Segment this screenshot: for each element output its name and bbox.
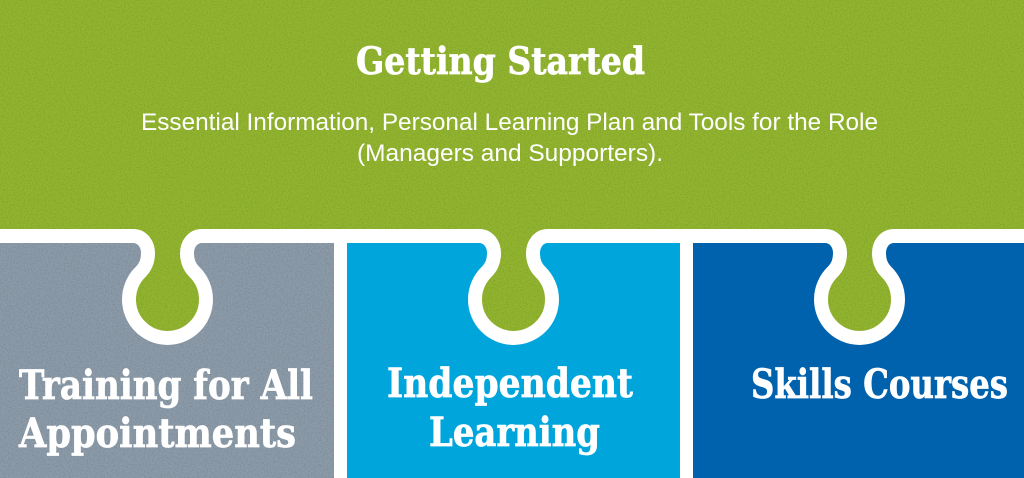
panel: getting started green puzzle piece xyxy=(0,0,1024,338)
description text xyxy=(141,109,878,167)
white gutter between first and second panels xyxy=(334,236,347,478)
description text: (Managers and Supporters). xyxy=(357,140,663,167)
description text: Essential Information, Personal Learning Plan and Tools for the Role xyxy=(141,109,878,136)
heading: training for all appointments xyxy=(18,362,313,457)
heading: independent learning: Learning xyxy=(429,409,600,456)
heading: independent learning xyxy=(387,360,633,456)
heading: independent learning: Independent xyxy=(387,360,633,407)
heading: training for all appointments: Appointments xyxy=(18,410,296,457)
panel: independent learning xyxy=(347,236,680,478)
heading: training for all appointments: Training for All xyxy=(19,362,313,409)
panel: training for all appointments xyxy=(0,236,334,478)
title: Getting Started xyxy=(356,39,645,83)
white gutter between second and third panels xyxy=(680,236,693,478)
panel: skills courses xyxy=(693,236,1024,478)
